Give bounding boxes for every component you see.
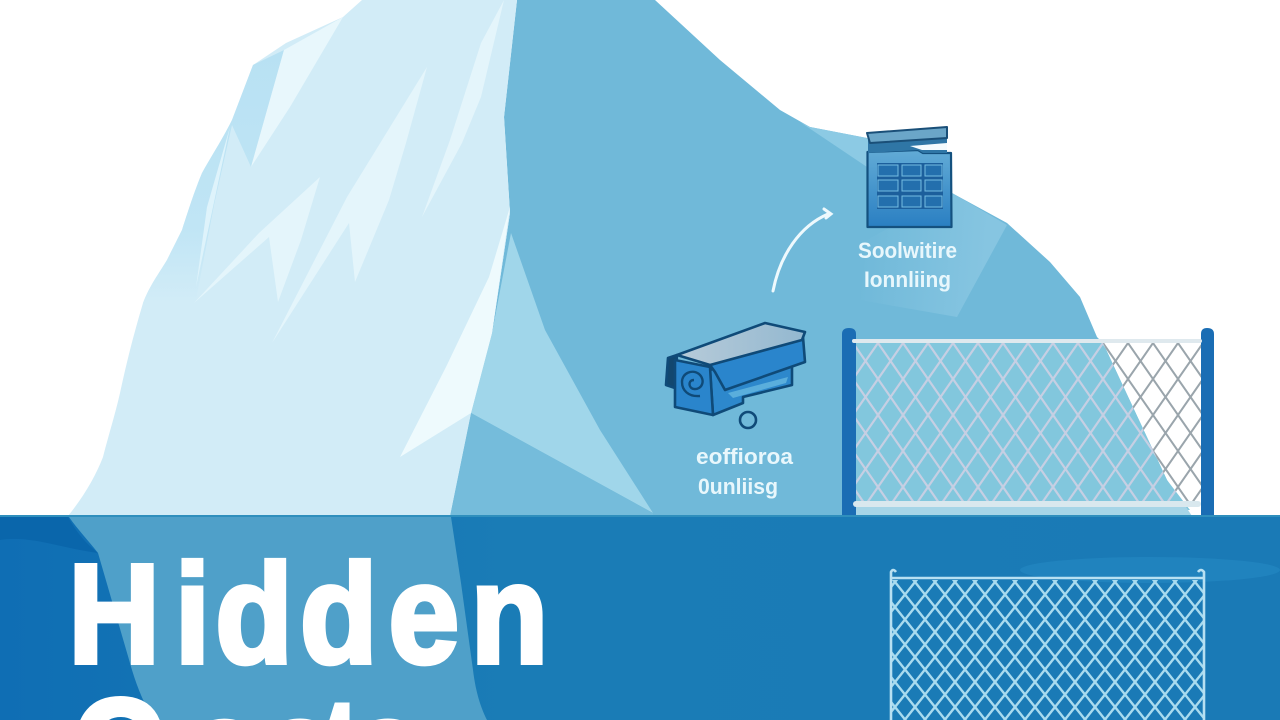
camera front face — [675, 360, 713, 415]
camera lower body — [710, 345, 792, 415]
submerged iceberg — [69, 517, 487, 720]
water dark corner — [0, 517, 98, 553]
fence tinted interior — [856, 343, 1190, 510]
label: upper icon: Soolwitire — [858, 238, 957, 263]
label: lower icon: 0unliisg — [698, 474, 778, 499]
camera rear mount — [666, 355, 677, 388]
fence base strip — [856, 507, 1192, 516]
iceberg left shadow facet — [143, 50, 284, 303]
ice highlight upper right — [422, 0, 504, 217]
water body — [0, 516, 1280, 720]
ice highlight left — [196, 127, 230, 287]
camera side hood — [710, 337, 805, 390]
camera light strip — [728, 377, 788, 398]
water — [0, 515, 1280, 720]
iceberg middle facet — [471, 233, 653, 513]
fence above water — [842, 328, 1214, 516]
iceberg lower facet — [450, 413, 653, 516]
iceberg shaded face — [450, 0, 1190, 516]
title: Hidden — [68, 536, 548, 693]
submerged mesh — [892, 580, 1204, 720]
icon: camera — [666, 323, 805, 428]
icon: software window — [867, 127, 952, 227]
fence under water — [891, 570, 1204, 720]
label: upper icon — [858, 238, 957, 292]
label: lower icon — [696, 444, 794, 499]
fence mesh over iceberg — [856, 343, 1186, 504]
iceberg above water — [68, 0, 1190, 516]
fence bottom rail — [853, 501, 1201, 507]
camera top face — [677, 323, 805, 365]
window hinge band — [868, 136, 947, 153]
water surface line — [0, 515, 1280, 517]
iceberg lighter facet — [860, 193, 1007, 317]
ice highlight large — [400, 207, 510, 457]
iceberg upper lighter band — [800, 122, 905, 167]
window body — [868, 150, 952, 227]
window grid cells — [878, 165, 942, 207]
ice highlight long zigzag — [272, 67, 427, 343]
submerged frame — [891, 570, 1204, 720]
camera ring — [740, 412, 756, 428]
camera lens swirl — [682, 372, 703, 396]
fence right post — [1201, 328, 1214, 516]
window top bar — [867, 127, 947, 143]
fence left post — [842, 328, 856, 516]
fence top rail — [852, 339, 1202, 343]
window dark panel — [877, 163, 943, 209]
label: lower icon: eoffioroa — [696, 444, 794, 469]
ice highlight zigzag — [194, 177, 320, 303]
arrow — [773, 209, 831, 291]
ice highlight one — [251, 17, 343, 167]
iceberg sunlit face — [68, 0, 517, 516]
fence mesh over white — [1103, 343, 1202, 504]
label: upper icon: Ionnliing — [864, 267, 951, 292]
water ripple — [1020, 557, 1280, 583]
window white strip — [910, 143, 947, 150]
